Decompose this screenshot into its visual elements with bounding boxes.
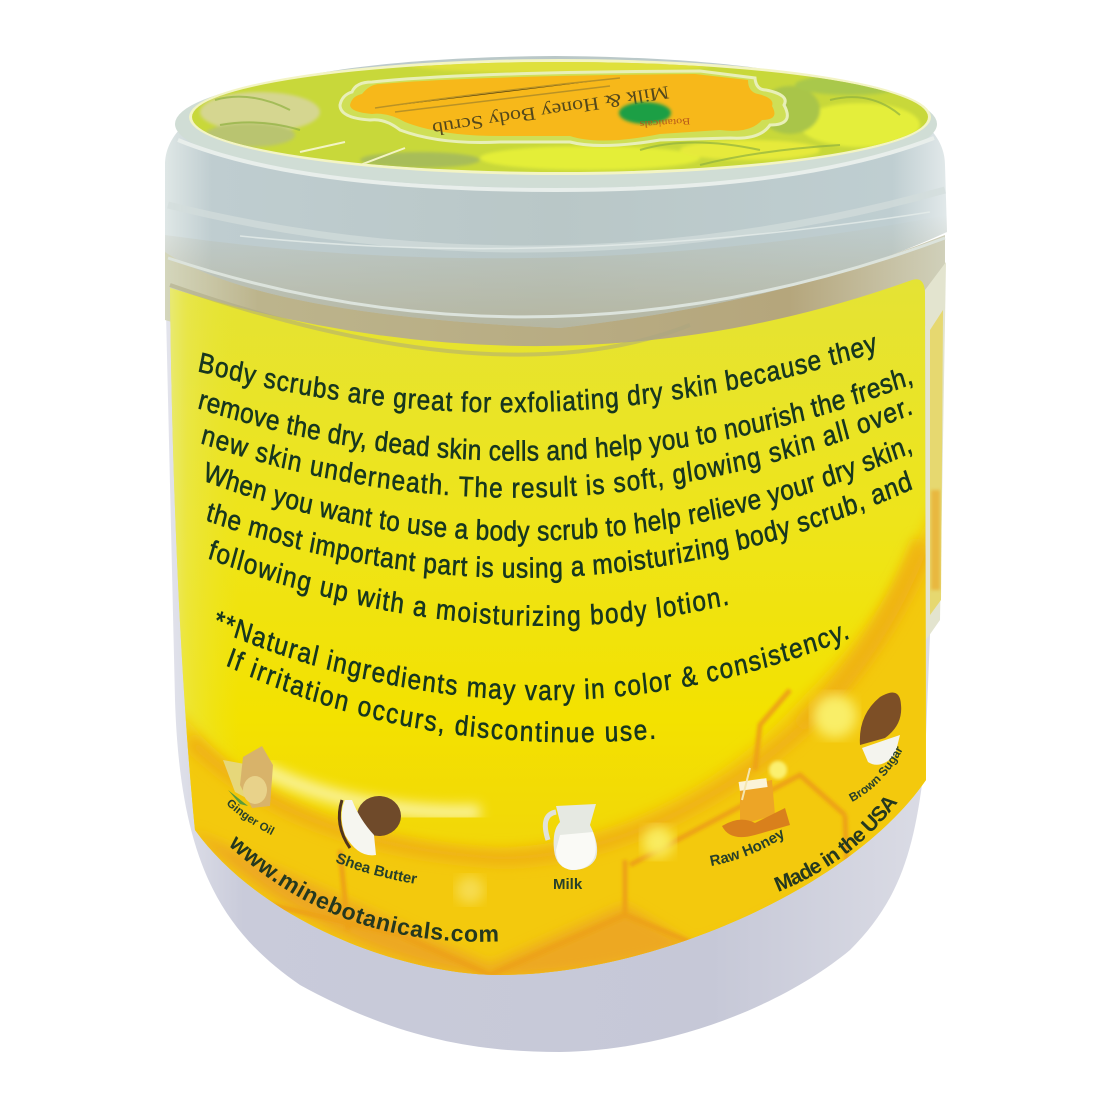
lid crease [168,190,945,249]
label: milk: Milk [553,876,583,893]
body copy: following up with a moisturizing body lotion. [208,540,728,632]
icon: ginger [223,746,273,808]
clear band showing scrub [165,235,945,380]
icon: shea butter [339,796,401,855]
icon: raw honey [722,768,790,837]
icon: milk jug [545,804,597,870]
lid logo: Botanicals [639,115,691,129]
decorative foliage [200,57,920,170]
lid sticker [180,55,940,180]
caution note [216,611,849,743]
right jar edge seen through [925,262,946,640]
jar body [165,235,946,1052]
caution note: If irritation occurs, discontinue use. [226,648,654,743]
pale highlight stripe [255,765,480,812]
lower honey shade [200,834,682,975]
body copy: remove the dry, dead skin cells and help you to nourish the fresh, [198,370,913,462]
back label [160,270,950,990]
label: ginger oil: Ginger Oil [228,800,275,835]
lid [165,56,947,355]
made in the USA: Made in the USA [774,798,898,892]
caution note: **Natural ingredients may vary in color & consistency. [216,611,849,706]
body copy: new skin underneath. The result is soft, glowing skin all over. [201,402,912,498]
label: shea butter: Shea Butter [336,854,418,884]
honeycomb lines [250,690,848,975]
label: brown sugar: Brown Sugar [848,746,902,802]
lid product name (upside down): Milk & Honey Body Scrub [431,81,670,139]
website: www.minebotanicals.com [230,836,498,942]
label: raw honey: Raw Honey [710,830,784,866]
body copy: Body scrubs are great for exfoliating dry skin because they [198,336,875,414]
lid logo [619,102,691,129]
lid bottom lip [168,238,945,317]
center plaque [340,71,787,146]
lid top rim [175,60,937,188]
icon: brown sugar [860,692,901,765]
body copy: When you want to use a body scrub to help relieve your dry skin, [206,442,912,547]
body copy [198,336,913,632]
honey glows [642,826,674,858]
body copy: the most important part is using a moisturizing body scrub, and [207,470,912,584]
honey swoosh [180,500,935,990]
